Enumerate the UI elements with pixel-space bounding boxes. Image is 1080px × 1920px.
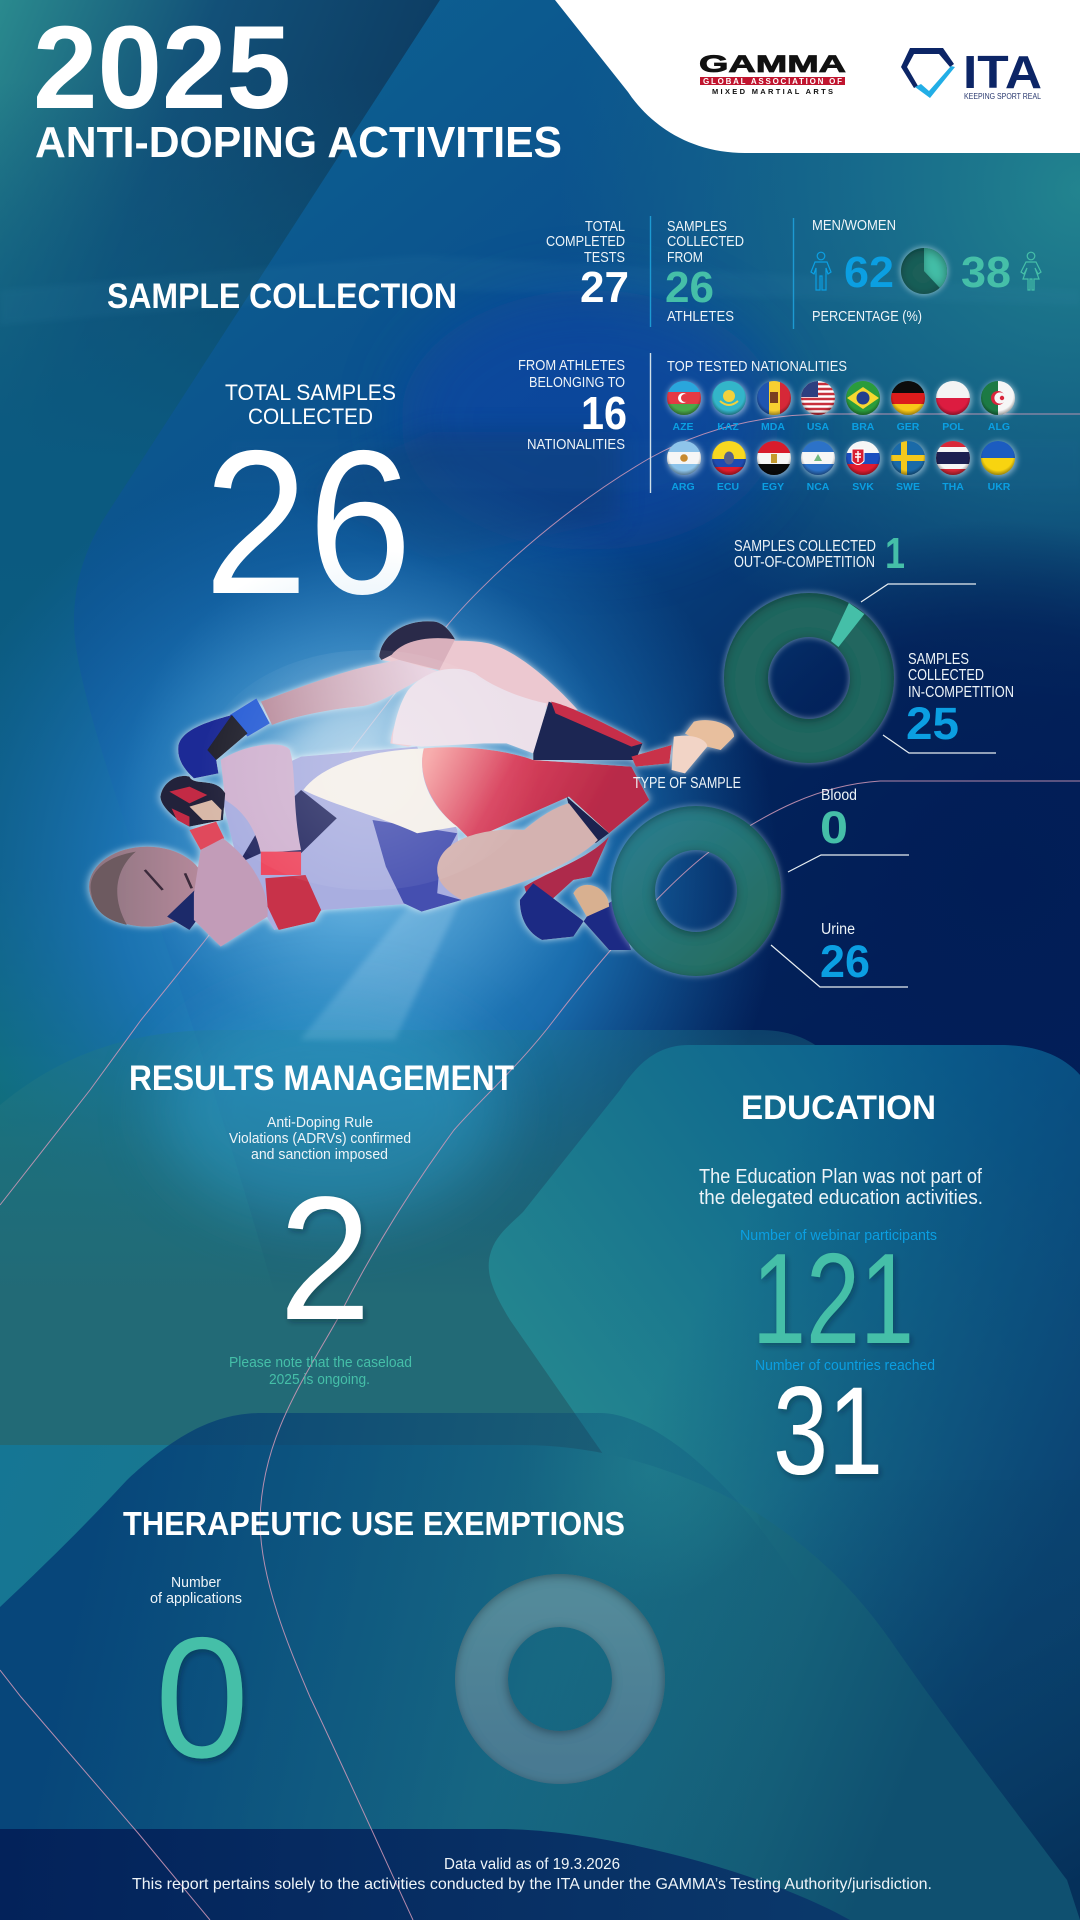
flag labels: NCA: [807, 481, 830, 493]
flag UKR: [981, 441, 1015, 475]
panel: therapeutic use exemptions: Number: [171, 1574, 221, 1591]
panel: therapeutic use exemptions: of applications: [150, 1590, 242, 1607]
stat: samples collected from athletes: 26: [665, 263, 714, 312]
title: ANTI-DOPING ACTIVITIES: [35, 118, 562, 167]
panel: results management: and sanction imposed: [251, 1146, 388, 1163]
flag labels: POL: [942, 421, 964, 433]
flag EGY: [757, 441, 791, 475]
flag BRA: [846, 381, 880, 415]
upper fighter arm: [261, 660, 439, 725]
title: 2025: [33, 2, 291, 134]
flag POL: [936, 381, 970, 415]
icon: man: [811, 252, 831, 290]
flag ARG: [667, 441, 701, 475]
pie: men women: [900, 247, 948, 295]
flag labels: KAZ: [717, 421, 739, 433]
stat: men women percentage: PERCENTAGE (%): [812, 308, 922, 325]
upper foot rear: [685, 720, 734, 750]
stat: total completed tests: 27: [580, 263, 629, 312]
stat: nationalities: BELONGING TO: [529, 374, 625, 391]
footer note: Data valid as of 19.3.2026: [444, 1856, 620, 1873]
upper fighter back: [381, 641, 578, 747]
divider lines: [650, 216, 794, 493]
panel: results management: Anti-Doping Rule: [267, 1114, 373, 1131]
stat: nationalities: FROM ATHLETES: [518, 357, 625, 374]
flag GER: [891, 381, 925, 415]
panel: education: The Education Plan was not part of: [699, 1166, 982, 1188]
flag labels: GER: [897, 421, 920, 433]
panel: results management: RESULTS MANAGEMENT: [129, 1059, 514, 1098]
type of sample heading: TYPE OF SAMPLE: [633, 775, 741, 792]
red shorts: [422, 747, 649, 840]
panel: results management: Violations (ADRVs) confirmed: [229, 1130, 411, 1147]
donut: out of / in competition: [746, 603, 872, 741]
logo: ITA: [901, 46, 1042, 101]
callout: blood: 0: [820, 802, 848, 853]
upper thigh: [393, 669, 547, 753]
red glove lower: [265, 875, 321, 930]
callout: out of competition: OUT-OF-COMPETITION: [734, 554, 875, 571]
lower fighter thigh: [437, 803, 598, 900]
glove red patch: [169, 787, 207, 827]
red glove dark: [160, 776, 225, 827]
stat: men women percentage: [811, 217, 1041, 325]
flag labels: ARG: [671, 481, 695, 493]
stat: nationalities: 16: [581, 387, 627, 439]
panel: therapeutic use exemptions: 0: [155, 1602, 249, 1794]
logo: ITA: KEEPING SPORT REAL: [964, 92, 1041, 101]
fighter wash: [200, 650, 540, 890]
upper fighter head: [379, 621, 455, 670]
lower fighter head: [89, 847, 205, 927]
body fill bridging the limbs: [221, 747, 462, 930]
heading: sample collection: SAMPLE COLLECTION: [107, 277, 457, 316]
panel: education: 121: [752, 1227, 914, 1371]
flag labels: ALG: [988, 421, 1010, 433]
panel: results management: Please note that the caseload: [229, 1354, 412, 1371]
stat: samples collected from athletes: FROM: [667, 249, 703, 266]
panel: education: Number of countries reached: [755, 1357, 935, 1374]
stat: samples collected from athletes: COLLECTED: [667, 233, 744, 250]
logo: GAMMA: [699, 51, 846, 96]
stat: samples collected from athletes: SAMPLES: [667, 218, 727, 235]
donut: TUE: [482, 1600, 638, 1758]
stat: samples collected from athletes: [665, 218, 744, 325]
stat: men women percentage: MEN/WOMEN: [812, 217, 896, 234]
flag NCA: [801, 441, 835, 475]
stat: total completed tests: TOTAL: [585, 218, 625, 235]
panel: therapeutic use exemptions: THERAPEUTIC USE EXEMPTIONS: [123, 1505, 625, 1542]
flag USA: [801, 381, 835, 415]
callout: in competition: [883, 651, 1014, 753]
flag SVK: [846, 441, 880, 475]
stat: nationalities: [518, 357, 627, 453]
flag labels: SWE: [896, 481, 920, 493]
dark hip band: [372, 820, 462, 912]
footer note: This report pertains solely to the activities conducted by the ITA under the GAMMA’s Testing Authority/jurisdiction.: [132, 1876, 932, 1893]
flag labels: EGY: [762, 481, 784, 493]
white thigh: [303, 748, 457, 833]
ankle red: [631, 745, 672, 767]
callout: in competition: SAMPLES: [908, 651, 969, 668]
white corner panel: [555, 0, 1080, 153]
callout: in competition: 25: [906, 698, 959, 749]
stat: samples collected from athletes: ATHLETES: [667, 308, 734, 325]
flag THA: [936, 441, 970, 475]
flag labels: ECU: [717, 481, 739, 493]
total samples collected: 26: [204, 408, 412, 637]
flag gloss: [667, 381, 1015, 475]
light burst behind fighters: [100, 550, 640, 1050]
red cuff: [189, 822, 224, 850]
panel: results management: 2: [279, 1161, 371, 1357]
glove palm: [189, 800, 222, 820]
panel: education: EDUCATION: [741, 1089, 936, 1127]
callout: in competition: IN-COMPETITION: [908, 684, 1014, 701]
flag labels: SVK: [852, 481, 874, 493]
lower fighter collar: [167, 887, 210, 930]
flag AZE: [667, 381, 701, 415]
lower red shorts dark: [567, 797, 609, 843]
flag ECU: [712, 441, 746, 475]
panel: education: Number of webinar participants: [740, 1227, 937, 1244]
callout: urine: 26: [820, 936, 870, 987]
callout: urine: Urine: [821, 921, 855, 938]
callout: blood: Blood: [821, 787, 857, 804]
total samples collected: TOTAL SAMPLES: [225, 380, 396, 405]
donut: type of sample: [633, 828, 759, 954]
callout: in competition: COLLECTED: [908, 667, 984, 684]
knee: [573, 885, 609, 917]
panel: education: 31: [773, 1362, 883, 1501]
lower fighter bent arm: [221, 744, 301, 853]
callout: urine: [771, 921, 908, 987]
logo: GAMMA: GAMMA: [699, 51, 846, 78]
lower red leg: [524, 837, 609, 917]
glove dark: [207, 715, 247, 760]
total samples collected: COLLECTED: [248, 404, 373, 429]
forearm: [194, 838, 268, 947]
logo: GAMMA: GLOBAL ASSOCIATION OF: [703, 77, 842, 86]
flag labels: MDA: [761, 421, 785, 433]
logo: GAMMA: MIXED MARTIAL ARTS: [712, 87, 833, 96]
red wrist: [261, 852, 301, 875]
footer note: [132, 1856, 932, 1893]
logo: ITA: ITA: [963, 46, 1042, 98]
upper foot front: [672, 736, 707, 773]
shin guard black: [533, 702, 643, 760]
stat: men women percentage: 38: [961, 248, 1011, 297]
callout: blood: [788, 787, 909, 872]
flags panel: top tested nationalities: TOP TESTED NATIONALITIES: [667, 358, 847, 375]
callout: out of competition: 1: [885, 529, 905, 578]
panel: therapeutic use exemptions: [123, 1505, 638, 1794]
panel: education: the delegated education activities.: [699, 1187, 983, 1209]
callout: out of competition: SAMPLES COLLECTED: [734, 538, 876, 555]
flag ALG: [981, 381, 1015, 415]
panel: results management: 2025 is ongoing.: [269, 1371, 370, 1388]
flag MDA: [757, 381, 791, 415]
flag glow: [667, 381, 1017, 477]
blue wrist wrap: [230, 698, 270, 737]
lower fighter dark band: [239, 790, 337, 863]
flag SWE: [891, 441, 925, 475]
title: [33, 2, 562, 167]
stat: total completed tests: TESTS: [584, 249, 625, 266]
stat: total completed tests: [546, 218, 629, 312]
flag labels: AZE: [672, 421, 694, 433]
fighters illustration: [89, 621, 734, 950]
lower knee shin: [520, 883, 631, 950]
flags panel: top tested nationalities: [667, 358, 1017, 493]
flag labels: UKR: [988, 481, 1011, 493]
flag labels: BRA: [852, 421, 875, 433]
blue glove: [178, 715, 247, 778]
callout: out of competition: [734, 529, 976, 602]
flag labels: [671, 421, 1011, 493]
shin red ridge: [551, 702, 643, 747]
icon: woman: [1021, 252, 1041, 290]
flag labels: THA: [942, 481, 964, 493]
flag labels: USA: [807, 421, 830, 433]
flag KAZ: [712, 381, 746, 415]
panel: education: [699, 1089, 983, 1501]
panel: results management: [129, 1059, 514, 1388]
stat: total completed tests: COMPLETED: [546, 233, 625, 250]
stat: nationalities: NATIONALITIES: [527, 436, 625, 453]
stat: men women percentage: 62: [844, 248, 894, 297]
decorative curve lines: [0, 414, 1080, 1920]
